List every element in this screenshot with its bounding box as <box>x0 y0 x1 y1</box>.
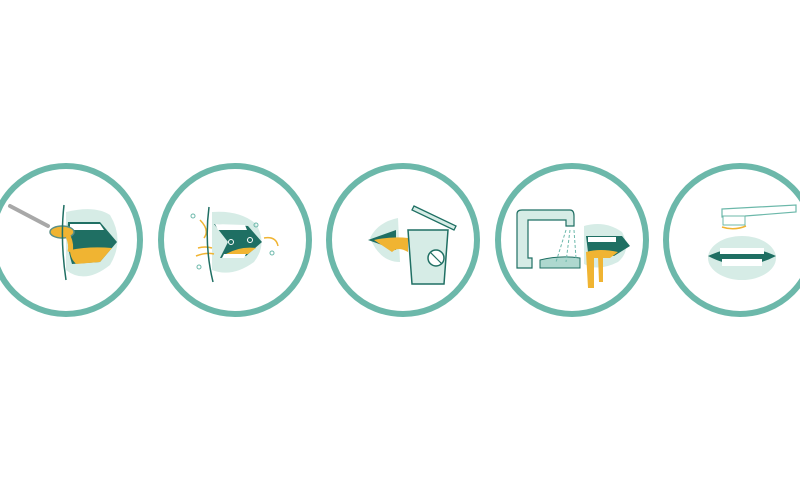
step 4: rinse with water <box>498 166 646 314</box>
step 5: brush teeth <box>666 166 800 314</box>
step 1: spoon feeding medicine into mouth <box>0 166 140 314</box>
step 2: swish in mouth <box>161 166 309 314</box>
step 3: spit into bin <box>329 166 477 314</box>
